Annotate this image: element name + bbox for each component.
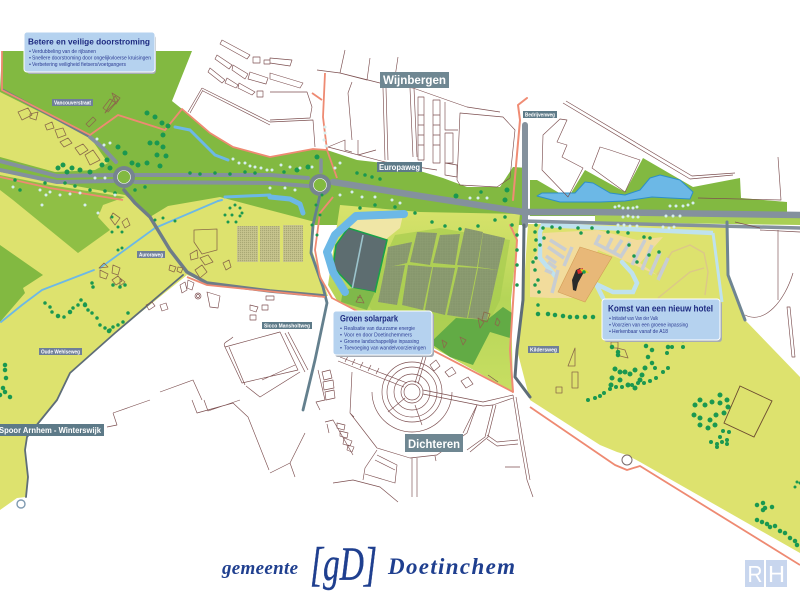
brown street and building outlines xyxy=(107,40,800,502)
label: Kildersweg: Kildersweg xyxy=(530,348,557,354)
label: Dichteren: Dichteren xyxy=(408,437,460,451)
logo: gemeente gD Doetinchem: [gD] xyxy=(310,538,377,591)
base map: yellow land west xyxy=(0,92,328,510)
logo: RH watermark xyxy=(745,560,787,587)
tan building outlines on yellow land xyxy=(18,93,628,393)
panel: callout Betere en veilige doorstroming: • xyxy=(29,56,31,62)
logo: gemeente gD Doetinchem: gemeente xyxy=(221,558,299,579)
panel: callout Betere en veilige doorstroming: Betere en veilige doorstroming xyxy=(28,36,150,46)
panel: callout Betere en veilige doorstroming: • xyxy=(29,49,31,55)
label: Wijnbergen: Wijnbergen xyxy=(383,73,446,87)
panel: callout Betere en veilige doorstroming: Verbetering veiligheid fietsers/voetgangers xyxy=(32,62,126,68)
light trees xyxy=(13,127,693,228)
label: Sicco Mansholtweg: Sicco Mansholtweg xyxy=(264,324,310,330)
logo: gemeente gD Doetinchem: Doetinchem xyxy=(387,554,515,579)
panel: callout Groen solarpark: Toevoeging van wandelvoorzieningen xyxy=(344,346,426,352)
label: Bedrijvenweg: Bedrijvenweg xyxy=(525,112,555,118)
label: Europaweg: Europaweg xyxy=(379,163,420,172)
panel: callout Groen solarpark: Realisatie van duurzame energie xyxy=(344,326,415,332)
panel: callout Komst van een nieuw hotel: Initiatief van Van der Valk xyxy=(612,316,658,322)
label: Auroraweg xyxy=(137,251,165,258)
panel: callout Groen solarpark: Groen solarpark xyxy=(340,314,399,324)
water xyxy=(1,127,693,322)
panel: callout Betere en veilige doorstroming: • xyxy=(29,62,31,68)
solar panels: dark field with green hedge xyxy=(333,215,403,310)
solar panels: west field xyxy=(237,225,303,262)
icon: hotel toucan logo xyxy=(572,268,589,291)
panel: callout Komst van een nieuw hotel xyxy=(602,299,722,342)
logo: gemeente gD Doetinchem xyxy=(221,538,515,591)
panel: callout Groen solarpark xyxy=(333,311,434,357)
base map: yellow land east xyxy=(517,224,800,553)
panel: callout Komst van een nieuw hotel: • xyxy=(609,322,611,328)
roads xyxy=(0,90,800,497)
label: Vancouverstraat: Vancouverstraat xyxy=(54,100,91,106)
panel: callout Komst van een nieuw hotel: • xyxy=(609,329,611,335)
label: Bedrijvenweg xyxy=(523,111,557,118)
roundabouts xyxy=(17,166,632,508)
panel: callout Komst van een nieuw hotel: Herkenbaar vanaf de A18 xyxy=(612,329,668,335)
panel: callout Groen solarpark: • xyxy=(340,346,342,352)
panel: callout Groen solarpark: • xyxy=(340,326,342,332)
label: Oude Wehlseweg: Oude Wehlseweg xyxy=(41,350,80,356)
panel: callout Betere en veilige doorstroming: Verdubbeling van de rijbanen xyxy=(32,49,96,55)
hotel site xyxy=(530,225,722,302)
panel: callout Groen solarpark: • xyxy=(340,339,342,345)
panel: callout Betere en veilige doorstroming: Snellere doorstroming door ongelijkvloerse kruisingen xyxy=(32,56,151,62)
trees xyxy=(0,113,800,545)
panel: callout Groen solarpark: Groene landschappelijke inpassing xyxy=(344,339,419,345)
panel: callout Betere en veilige doorstroming xyxy=(24,32,156,74)
logo: RH watermark: R xyxy=(748,561,762,587)
logo: RH watermark: H xyxy=(768,561,785,587)
panel: callout Groen solarpark: • xyxy=(340,332,342,338)
panel: callout Komst van een nieuw hotel: Komst van een nieuw hotel xyxy=(608,304,713,314)
solar area outbuildings and square field xyxy=(724,386,772,437)
label: Spoor Arnhem - Winterswijk: Spoor Arnhem - Winterswijk xyxy=(0,425,101,435)
label: Auroraweg: Auroraweg xyxy=(139,252,163,258)
panel: callout Komst van een nieuw hotel: Voorzien van een groene inpassing xyxy=(612,322,688,328)
solar panels: main field xyxy=(378,228,505,320)
solar park land xyxy=(328,205,520,392)
panel: callout Groen solarpark: Voor en door Doetinchemmers xyxy=(344,332,412,338)
panel: callout Komst van een nieuw hotel: • xyxy=(609,316,611,322)
base map: green zones xyxy=(0,51,800,225)
